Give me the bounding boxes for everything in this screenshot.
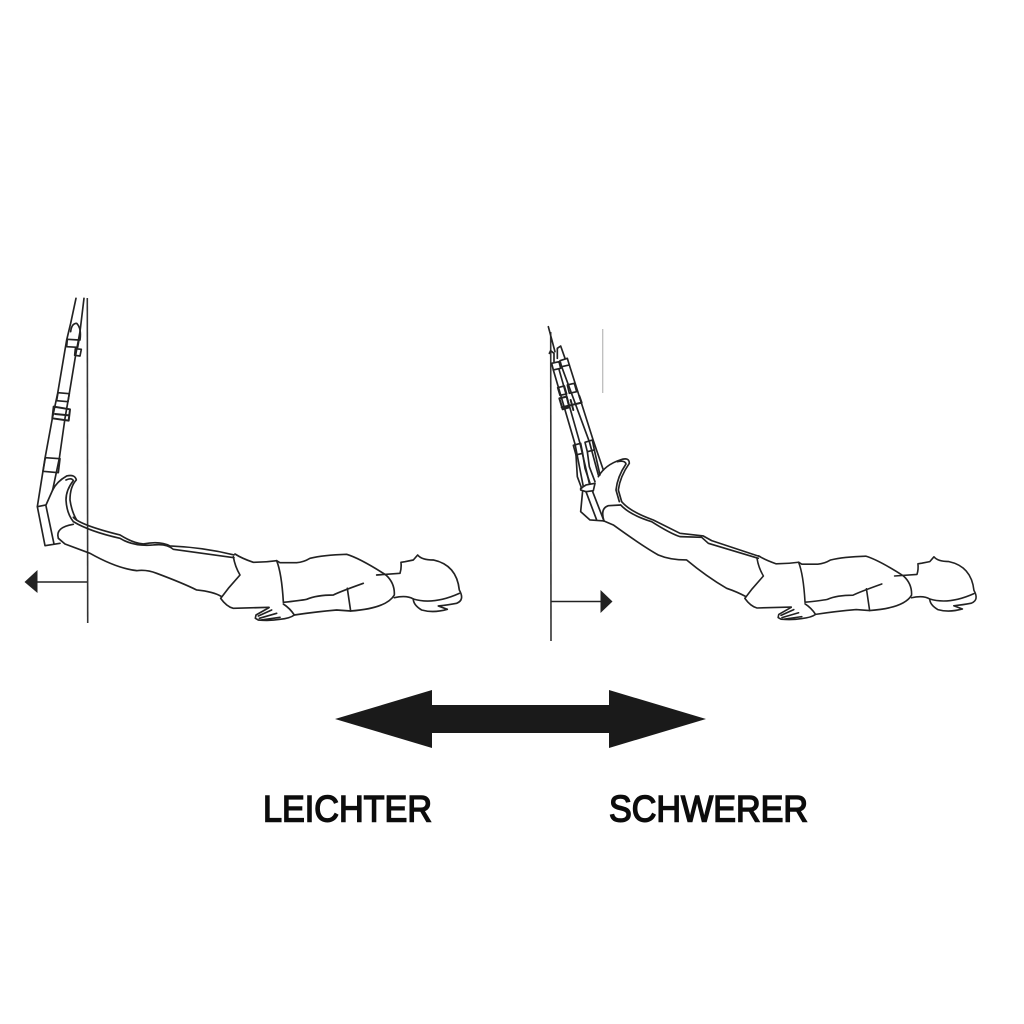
torso and head left <box>221 554 462 620</box>
small arrow pointing right <box>551 590 612 613</box>
shoe and leg right <box>598 459 760 597</box>
double-headed arrow <box>335 690 706 748</box>
label: LEICHTER: LEICHTER <box>263 788 432 830</box>
small arrow pointing left <box>24 570 87 593</box>
anchor vertical line right <box>550 332 552 641</box>
suspension straps right <box>548 327 604 521</box>
suspension straps left <box>37 298 84 546</box>
faint grey vertical line <box>602 329 604 393</box>
shoe and leg left <box>53 475 234 597</box>
figure: harder position, feet in straps in front of the anchor line <box>548 327 976 641</box>
figure: easier position, feet in straps behind the anchor line <box>24 298 462 623</box>
anchor vertical line left <box>86 298 89 623</box>
torso and head right <box>745 556 976 620</box>
label: SCHWERER: SCHWERER <box>609 788 808 830</box>
